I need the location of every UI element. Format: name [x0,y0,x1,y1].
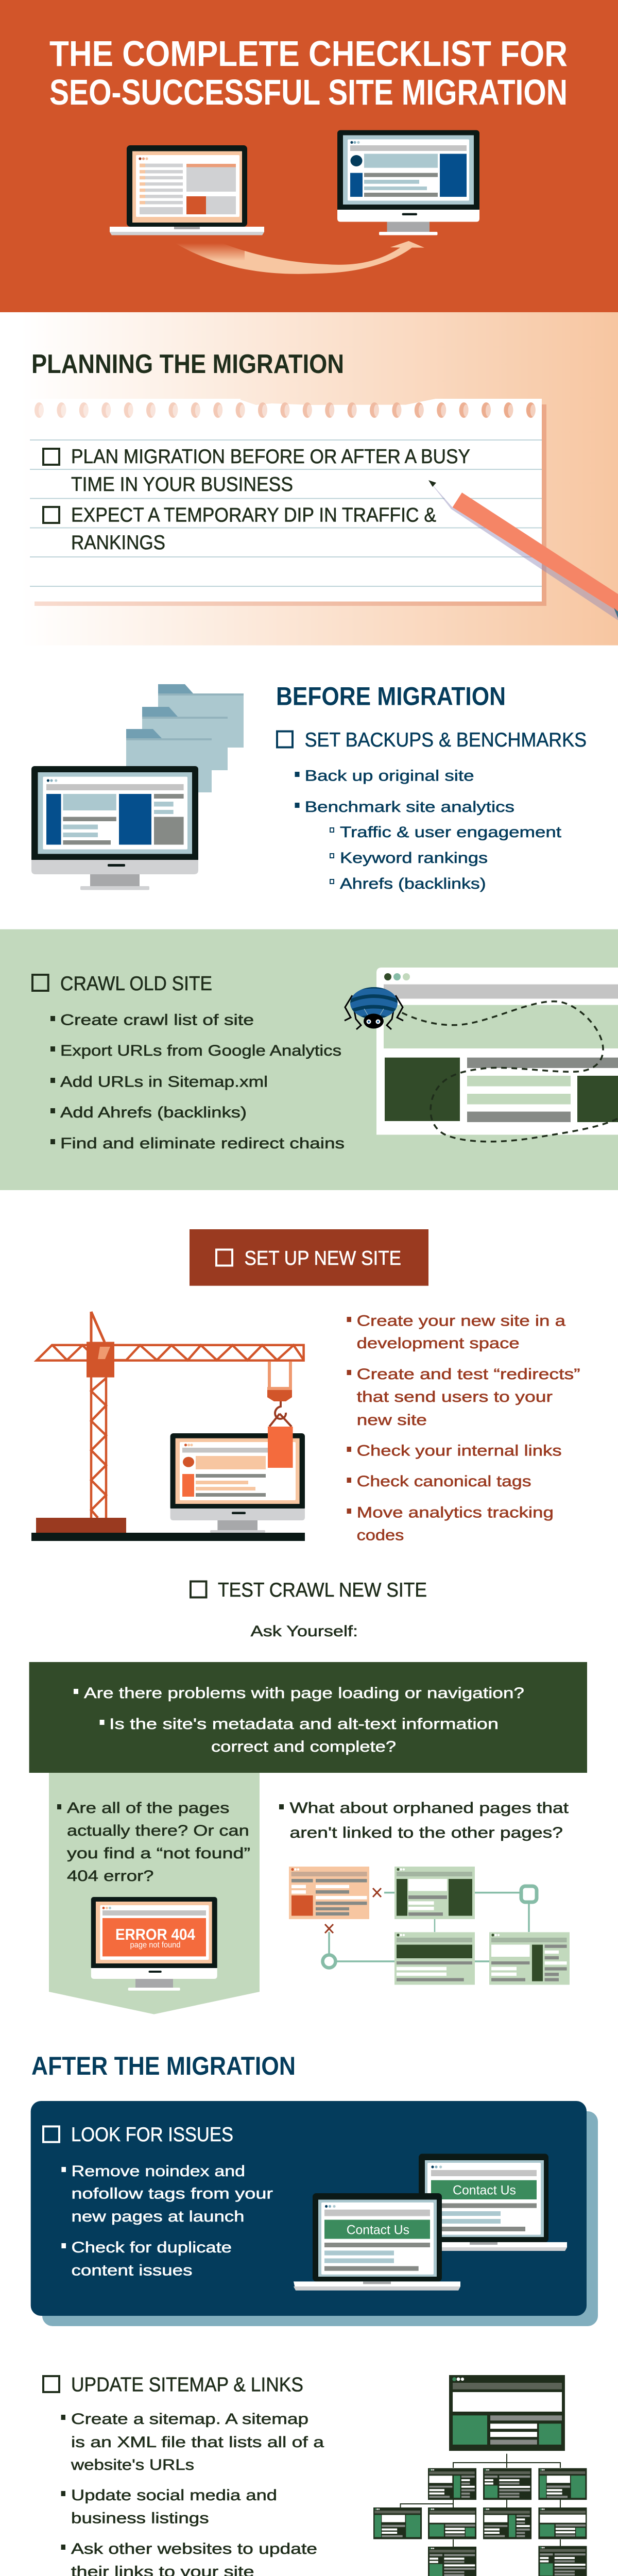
subheading: ask yourself: Ask Yourself: [251,1623,358,1640]
bullet list: sitemap: is an XML file that lists all of a [71,2434,324,2451]
bullet list: backups [295,768,562,892]
checklist item: set backups: SET BACKUPS & BENCHMARKS [305,729,587,751]
illustration: new site monitor [170,1433,305,1533]
bullet list: crawl steps: Export URLs from Google Analytics [60,1042,341,1059]
icon: front laptop contact page [294,2193,460,2291]
checklist item: expect dip: EXPECT A TEMPORARY DIP IN TRAFFIC & [71,504,436,527]
bullet list: new site setup: codes [357,1527,404,1544]
panel: test crawl new site [29,1579,587,2014]
panel: questions: correct and complete? [211,1738,396,1755]
dashed crawl path [402,1002,618,1142]
panel: questions: Are there problems with page loading or navigation? [84,1685,524,1702]
diagram: linked pages and orphans [289,1867,570,1985]
bullet list: backups: Traffic & user engagement [340,824,562,841]
bullet list: new site setup: Create and test “redirects” [357,1366,580,1383]
bullet list: crawl steps: Find and eliminate redirect chains [60,1135,345,1152]
icon: backup monitor [31,766,198,890]
icon: front laptop contact page: Contact Us [347,2223,409,2237]
panel: questions: Is the site's metadata and alt-text information [109,1716,499,1733]
bullet list: new site setup: Create your new site in a [357,1313,565,1330]
bullet list: new site setup: development space [357,1335,520,1352]
question: orphaned pages: aren't linked to the other pages? [289,1824,563,1841]
title [49,33,568,112]
banner: 404 question: you find a “not found” [67,1845,250,1862]
icon: error 404 monitor: page not found [130,1941,180,1950]
icon: back laptop contact page [400,2154,567,2251]
heading: AFTER THE MIGRATION [31,2052,296,2080]
bullet list: new site setup: new site [357,1412,427,1429]
bullet list: issues: nofollow tags from your [71,2185,273,2202]
panel: planning the migration [0,312,618,646]
panel: questions [29,1662,587,1773]
header panel [0,0,618,312]
button heading [190,1229,428,1286]
title: THE COMPLETE CHECKLIST FOR [49,33,568,74]
icon: new site desktop monitor [337,130,479,235]
bullet list: backups: Back up original site [305,768,474,785]
icon: error 404 monitor [91,1897,217,1991]
banner: 404 question [49,1773,260,2014]
icon: error 404 monitor: ERROR 404 [115,1925,196,1943]
checklist item: expect dip [43,504,436,554]
icon: pencil [428,480,618,620]
bullet list: sitemap: Update social media and [71,2487,277,2504]
bullet list: issues: new pages at launch [71,2208,244,2225]
question: orphaned pages: What about orphaned pages that [289,1800,569,1817]
bullet list: crawl steps: Create crawl list of site [60,1012,254,1029]
bullet list: issues: content issues [71,2262,193,2279]
checklist item: crawl old site: CRAWL OLD SITE [60,973,212,995]
checklist item: plan migration: TIME IN YOUR BUSINESS [71,473,293,496]
bullet list: issues: Remove noindex and [71,2163,245,2180]
card: look for issues [31,2101,598,2326]
bullet list: new site setup: Move analytics tracking [357,1504,554,1521]
bullet list: issues: Check for duplicate [71,2239,232,2256]
bullet list: sitemap: business listings [71,2510,209,2527]
icon: old site laptop [110,145,264,235]
bullet list: new site setup: that send users to your [357,1388,553,1405]
checklist item: look for issues: LOOK FOR ISSUES [71,2124,233,2146]
heading: PLANNING THE MIGRATION [31,349,344,379]
bullet list: new site setup [347,1313,580,1544]
question: orphaned pages [279,1800,569,1841]
heading: BEFORE MIGRATION [276,682,506,710]
checklist item: update sitemap and links: UPDATE SITEMAP & LINKS [71,2374,303,2396]
bullet list: sitemap: Create a sitemap. A sitemap [71,2411,308,2428]
bullet list: crawl steps: Add Ahrefs (backlinks) [60,1104,247,1121]
button heading: SET UP NEW SITE [244,1247,401,1269]
bullet list: crawl steps [50,1012,345,1152]
checklist item: plan migration [43,446,470,496]
bullet list: crawl steps: Add URLs in Sitemap.xml [60,1074,268,1090]
panel: crawl old site [0,929,618,1190]
panel: after the migration [31,2052,598,2576]
icon: back laptop contact page: Contact Us [453,2183,516,2198]
illustration: crane [31,1312,305,1541]
checklist item: expect dip: RANKINGS [71,532,165,554]
bullet list: backups: Benchmark site analytics [305,799,514,816]
panel: set up new site [31,1229,580,1544]
bullet list: issues [61,2163,273,2279]
bullet list: backups: Ahrefs (backlinks) [340,875,486,892]
checklist item: test crawl: TEST CRAWL NEW SITE [218,1579,427,1601]
banner: 404 question: 404 error? [67,1868,153,1885]
diagram: sitemap tree [373,2375,587,2576]
illustration: old site browser [376,968,618,1134]
bullet list: sitemap: website's URLs [71,2456,194,2473]
checklist item: plan migration: PLAN MIGRATION BEFORE OR AFTER A BUSY [71,446,470,468]
bullet list: new site setup: Check canonical tags [357,1473,531,1490]
bullet list: backups: Keyword rankings [340,850,488,867]
icon: stacked folders [126,684,244,792]
bullet list: sitemap [61,2411,324,2576]
icon: spider [345,987,403,1029]
panel: before migration [31,682,587,892]
banner: 404 question: Are all of the pages [67,1800,229,1817]
bullet list: sitemap: Ask other websites to update [71,2540,317,2557]
icon: crane hook carrying page [267,1362,293,1468]
notepad [30,398,546,606]
banner: 404 question: actually there? Or can [67,1822,249,1839]
bullet list: new site setup: Check your internal links [357,1442,562,1459]
arrow: migration to new site [167,241,424,274]
